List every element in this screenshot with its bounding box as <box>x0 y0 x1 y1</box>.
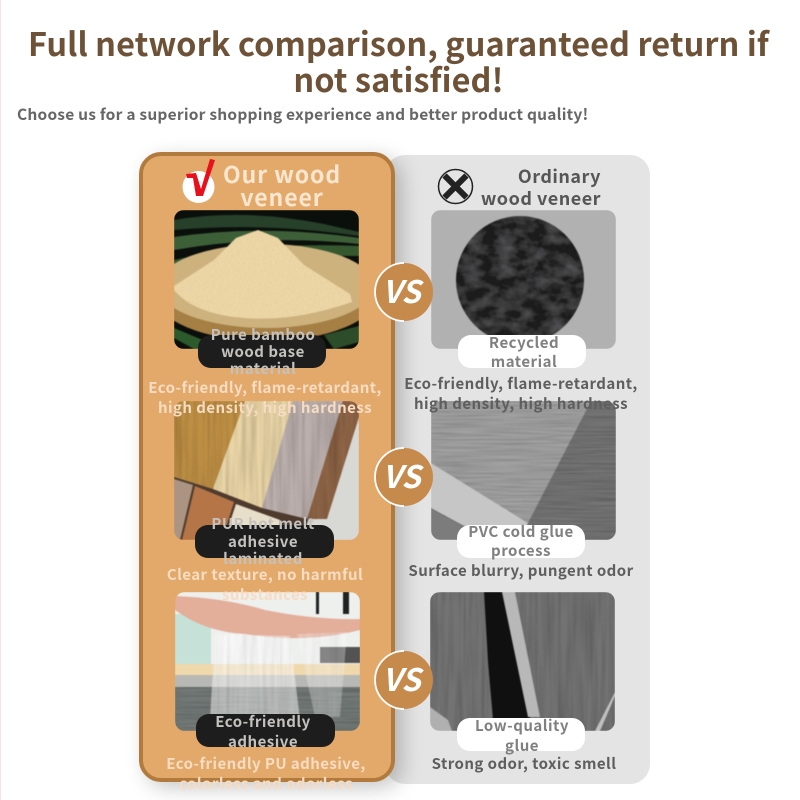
label: pure bamboo wood base material: wood base <box>221 341 305 362</box>
label: recycled material <box>489 332 559 372</box>
label: eco-friendly adhesive: adhesive <box>228 731 298 752</box>
text: recycled drawbacks: Eco-friendly, flame-retardant, <box>404 373 638 394</box>
VS badge 1: VS <box>382 267 424 312</box>
text: PU adhesive benefits: Eco-friendly PU adhesive, <box>166 753 366 774</box>
pill: low-quality glue <box>457 718 585 751</box>
label: pure bamboo wood base material: material <box>230 358 296 379</box>
title <box>28 19 770 102</box>
text: PU adhesive benefits <box>166 753 366 794</box>
icon: black cross <box>438 168 474 204</box>
text: recycled drawbacks: high density, high hardness <box>414 393 628 414</box>
image: adhesive stretching from hand <box>175 592 360 731</box>
text: glue drawbacks: Strong odor, toxic smell <box>432 753 616 774</box>
image: bamboo powder <box>174 210 359 349</box>
text: bamboo benefits: Eco-friendly, flame-retardant, <box>148 377 382 398</box>
heading: our wood veneer <box>223 156 341 213</box>
VS badge 2: VS <box>382 452 424 497</box>
pill: recycled material <box>458 335 586 368</box>
title: not satisfied! <box>293 55 504 102</box>
text: PUR benefits <box>167 564 363 605</box>
subtitle: Choose us for a superior shopping experience and better product quality! <box>17 103 589 125</box>
VS badge 2 <box>374 447 433 507</box>
pill: PVC cold glue <box>457 525 585 558</box>
pill: PUR hot melt <box>195 525 334 558</box>
text: PU adhesive benefits: colorless and odorless <box>179 773 353 794</box>
image: wood veneer rolls <box>174 401 359 540</box>
panel: our wood veneer <box>139 152 395 782</box>
label: recycled material: Recycled <box>489 332 559 353</box>
text: PVC drawbacks: Surface blurry, pungent odor <box>408 560 634 581</box>
label: low-quality glue <box>475 715 569 756</box>
image: black recycled powder <box>431 210 616 349</box>
label: eco-friendly adhesive: Eco-friendly <box>215 711 311 732</box>
heading: our wood veneer: Our wood <box>223 156 341 190</box>
label: PUR hot melt adhesive laminated: adhesive <box>228 530 298 552</box>
VS badge 3 <box>374 650 433 710</box>
label: PVC cold glue process <box>468 521 574 561</box>
text: PUR benefits: substances <box>222 584 308 605</box>
label: eco-friendly adhesive <box>215 711 311 752</box>
label: pure bamboo wood base material: Pure bamboo <box>211 324 315 345</box>
label: PUR hot melt adhesive laminated: PUR hot melt <box>211 513 315 534</box>
heading: ordinary wood veneer <box>481 163 601 211</box>
panel: ordinary wood veneer <box>385 155 650 784</box>
VS badge 3: VS <box>382 655 424 700</box>
label: PUR hot melt adhesive laminated <box>211 513 315 569</box>
label: PUR hot melt adhesive laminated: laminated <box>223 548 303 569</box>
text: recycled drawbacks <box>404 373 638 414</box>
image: grey PVC veneer <box>431 401 616 540</box>
image: low-quality glue joint <box>430 592 615 731</box>
label: low-quality glue: glue <box>505 735 539 756</box>
pill: eco-friendly adhesive <box>196 714 335 747</box>
text: PUR benefits: Clear texture, no harmful <box>167 564 363 585</box>
title: Full network comparison, guaranteed return if <box>28 19 769 66</box>
VS badge 1 <box>374 262 433 322</box>
heading: ordinary wood veneer: Ordinary <box>518 163 601 189</box>
page edge tint <box>0 0 1 800</box>
label: pure bamboo wood base material <box>211 324 315 379</box>
text: bamboo benefits: high density, high hardness <box>158 397 372 418</box>
label: PVC cold glue process: process <box>491 540 551 561</box>
label: recycled material: material <box>491 351 557 372</box>
text: bamboo benefits <box>148 377 382 418</box>
label: PVC cold glue process: PVC cold glue <box>468 521 574 542</box>
pill: pure bamboo <box>198 335 326 368</box>
heading: our wood veneer: veneer <box>240 179 324 213</box>
label: low-quality glue: Low-quality <box>475 715 569 736</box>
heading: ordinary wood veneer: wood veneer <box>481 185 601 211</box>
icon: red check <box>182 159 215 203</box>
